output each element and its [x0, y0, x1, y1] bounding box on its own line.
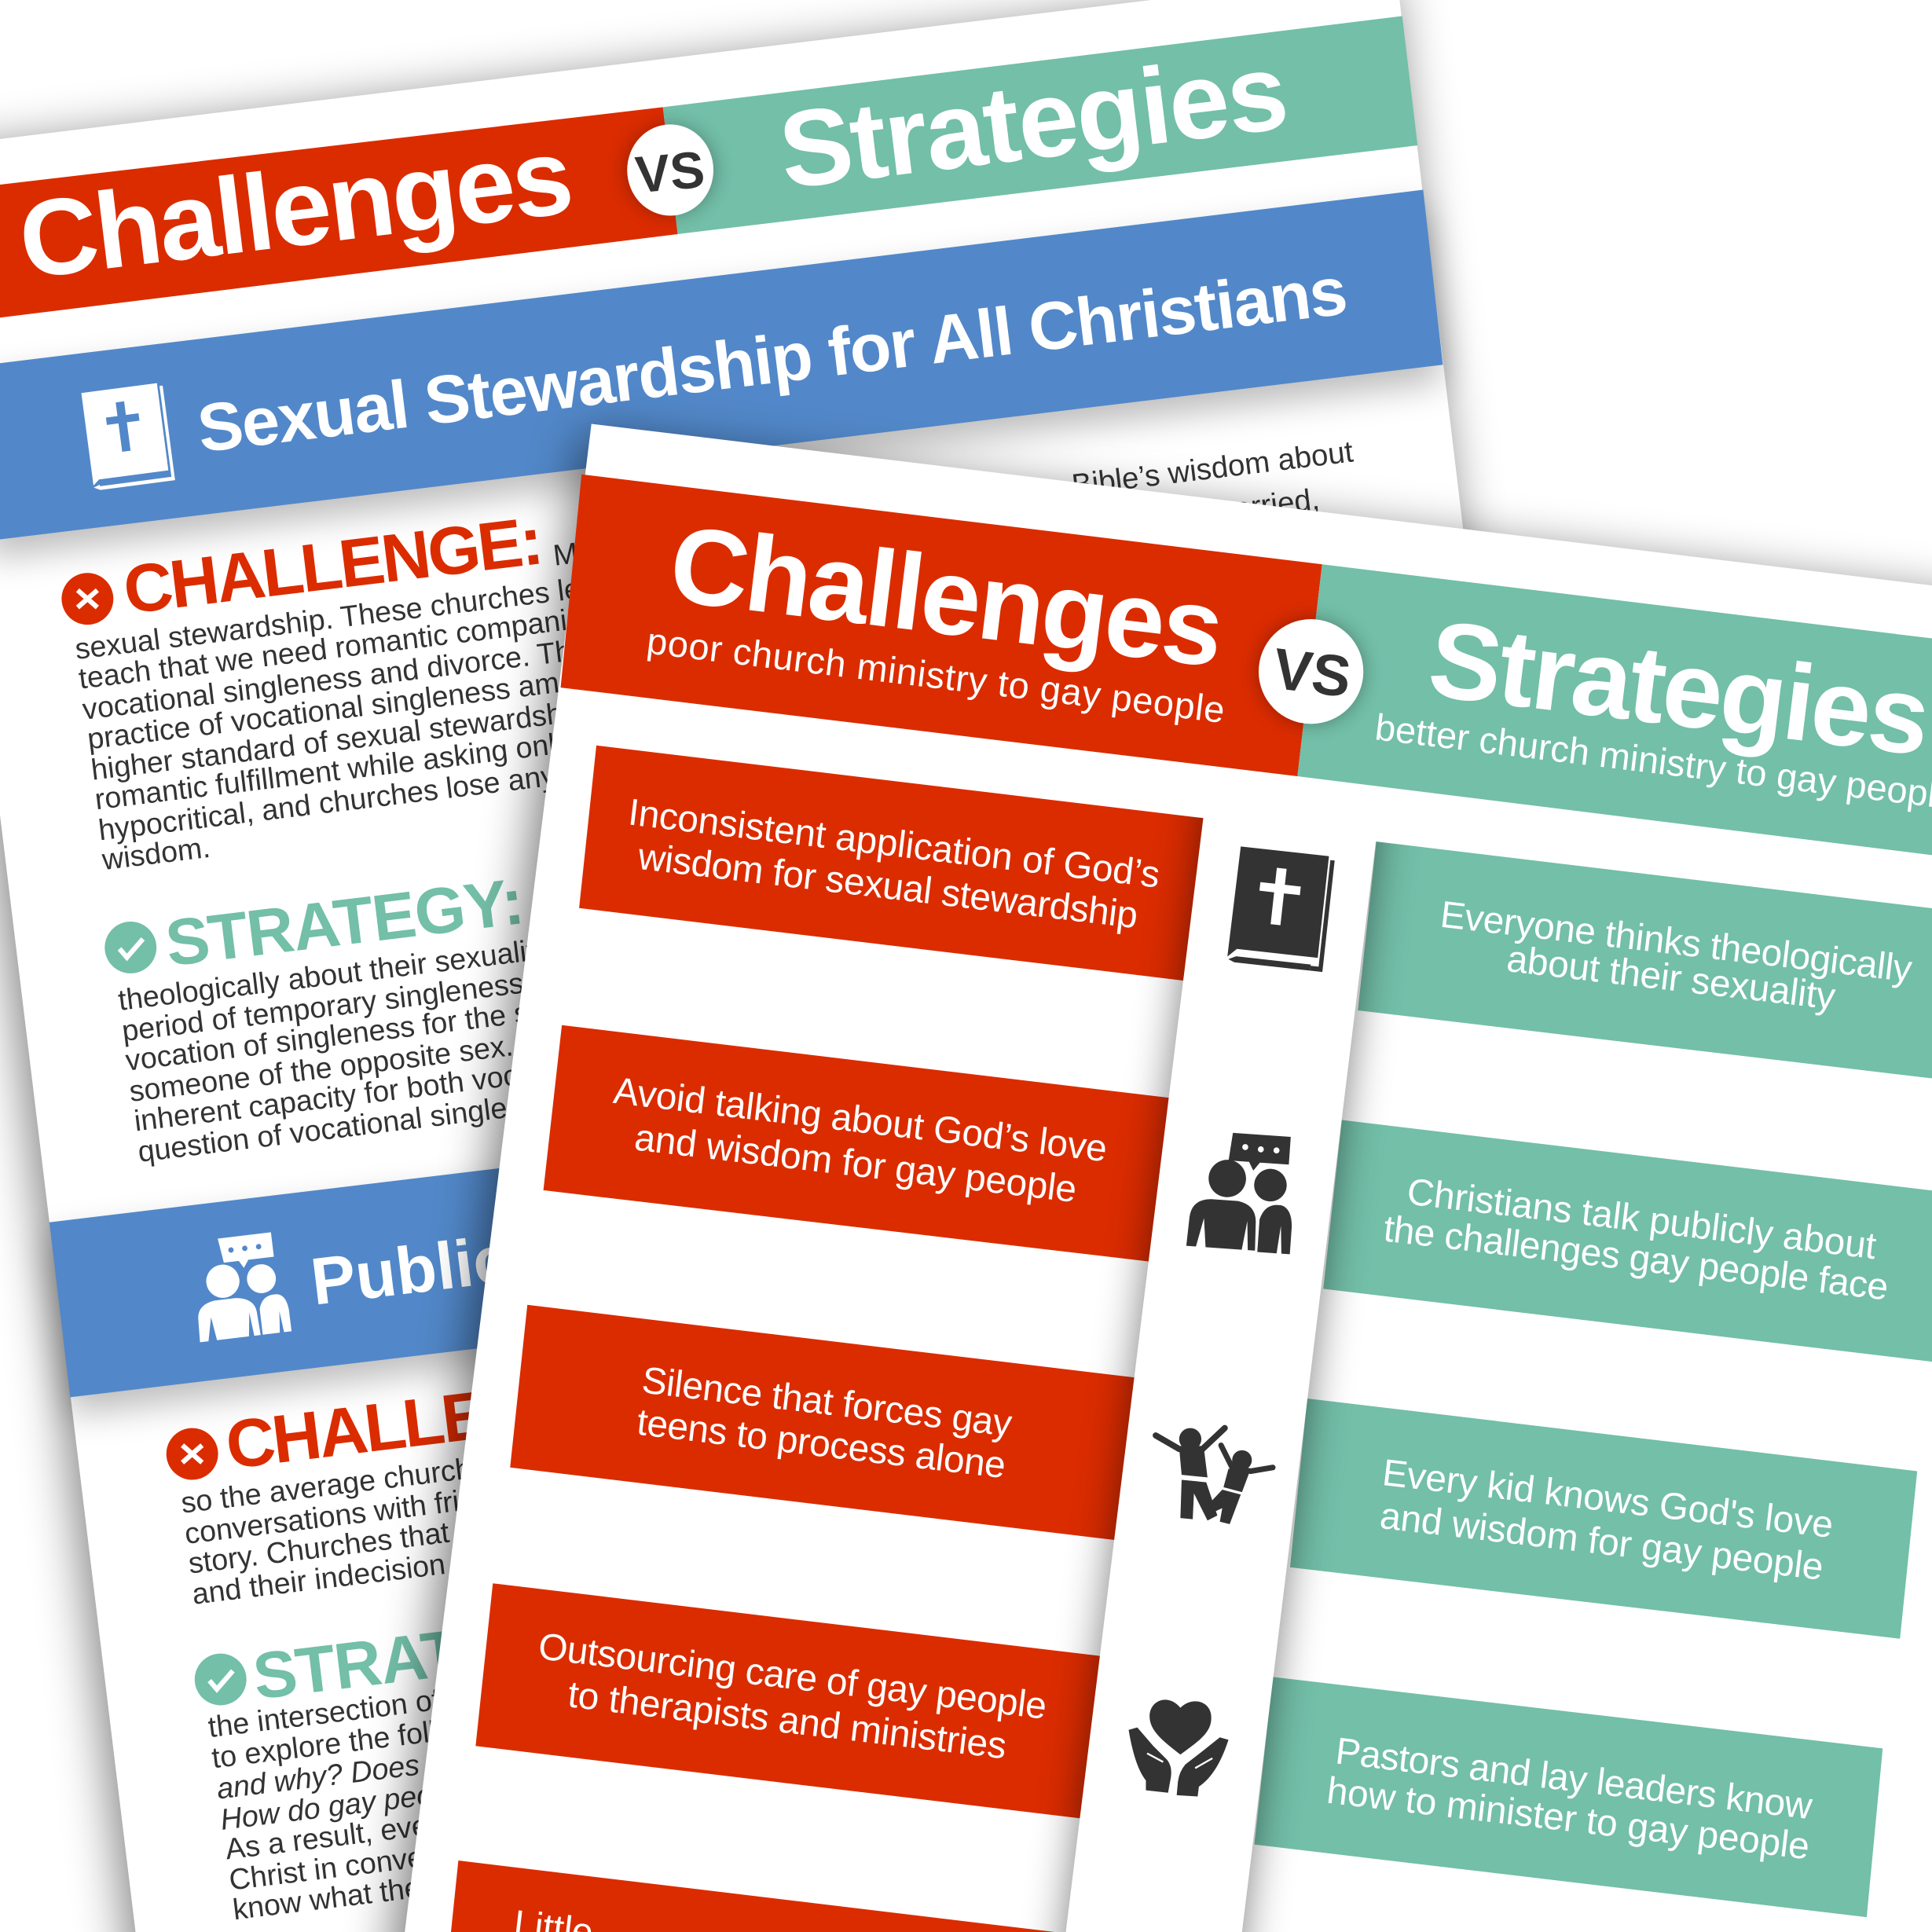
challenge 2 body text: so the average church member	[179, 1437, 589, 1520]
challenge body text: hypocritical, and churches lose any	[97, 758, 558, 846]
box 3	[510, 1305, 1135, 1540]
challenge body text: higher standard of sexual stewardship	[90, 694, 588, 786]
icon: white bible	[82, 383, 175, 491]
box text: strategies: the challenges gay people face	[1381, 1208, 1890, 1309]
challenge body text	[73, 567, 655, 876]
strategy heading: STRATEGY:	[162, 864, 528, 980]
front header: challenges	[561, 475, 1322, 776]
box text: strategies: and wisdom for gay people	[1378, 1495, 1826, 1589]
challenge body text: vocational singleness and divorce. This	[81, 632, 595, 726]
front header: challenges: poor church ministry to gay people	[645, 619, 1227, 731]
right text fragment	[1011, 434, 1355, 553]
icon: challenge x	[61, 573, 113, 625]
strategy body text: theologically about their sexuality	[116, 932, 551, 1017]
box text: challenges: teens to process alone	[635, 1402, 1008, 1487]
band shadow: stewardship	[0, 207, 1443, 558]
box text: strategies: how to minister to gay people	[1325, 1770, 1812, 1868]
section heading: public conversations	[49, 1045, 1550, 1397]
box 4	[475, 1583, 1100, 1819]
strategy body text: period of temporary singleness	[120, 966, 526, 1047]
box text: challenges: Avoid talking about God’s love	[611, 1070, 1109, 1170]
challenge 2 body text: story. Churches that remain	[186, 1504, 549, 1580]
back header: strategies band: Strategies	[773, 31, 1294, 212]
strategy 2 body text: As a result, every	[223, 1806, 454, 1865]
front page	[405, 423, 1932, 1932]
strategy boxes	[1254, 841, 1932, 1917]
icon: strategy check 2	[195, 1654, 247, 1705]
strategy body text: someone of the opposite sex.	[127, 1028, 515, 1108]
front vs badge	[1259, 619, 1363, 724]
strategy body text: vocation of singleness for the sake	[123, 990, 578, 1077]
box text: challenges: Inconsistent application of God’s	[626, 791, 1162, 896]
challenge body text: practice of vocational singleness among	[86, 660, 610, 755]
heading text: Sexual Stewardship for All Christians	[193, 253, 1351, 467]
box text: challenges: Silence that forces gay	[640, 1359, 1014, 1445]
strategy body text: question of vocational singleness	[136, 1083, 570, 1168]
challenge heading: Many churches	[552, 515, 754, 572]
strategy box 2	[1323, 1120, 1932, 1366]
box text: strategies	[1325, 894, 1914, 1868]
challenge body text: romantic fulfillment while asking only	[93, 725, 572, 816]
band shadow: public	[49, 1062, 1550, 1414]
challenge 2 body text: conversations with friends	[183, 1476, 525, 1550]
box text: strategies: about their sexuality	[1505, 938, 1838, 1018]
back vs badge: VS	[633, 140, 707, 203]
challenge 2 body text	[179, 1437, 589, 1611]
challenge heading 2: CHALLENGE:	[222, 1358, 649, 1483]
strategy heading 2: STRATEGY:	[249, 1597, 615, 1713]
front header: strategies	[1297, 564, 1932, 860]
heading text: Public Conversations	[307, 1163, 992, 1319]
right text fragment: those who are married,	[1011, 482, 1322, 553]
box text: challenges: wisdom for sexual stewardship	[635, 836, 1140, 937]
strategy body text	[116, 932, 598, 1168]
box text: strategies: Pastors and lay leaders know	[1333, 1730, 1815, 1828]
back vs badge	[626, 124, 715, 215]
box 1	[579, 746, 1204, 981]
icon: people talking	[1186, 1130, 1298, 1254]
back header: challenges band: Challenges	[13, 115, 579, 302]
box text: strategies: Every kid knows God's love	[1380, 1452, 1835, 1546]
strategy 2 body text	[207, 1675, 542, 1926]
strategy 2 body text: and why? Does scripture	[214, 1733, 542, 1806]
front header: challenges: Challenges	[664, 504, 1230, 690]
strategy body text: inherent capacity for both vocations	[132, 1049, 598, 1138]
box text: challenges	[511, 791, 1162, 1932]
icon: bible	[1226, 846, 1335, 972]
strategy 2 body text: know what they	[231, 1868, 438, 1926]
centre strip	[1066, 764, 1383, 1932]
back header: strategies band	[663, 16, 1417, 234]
front page shadow	[397, 436, 1932, 1932]
icon: children playing	[1156, 1428, 1273, 1524]
challenge body text: teach that we need romantic companionship	[77, 592, 655, 695]
strategy box 4	[1254, 1677, 1883, 1917]
box text: challenges: Outsourcing care of gay people	[536, 1626, 1049, 1728]
strategy box 1	[1358, 841, 1932, 1083]
strategy 2 body text: to explore the following	[210, 1705, 514, 1774]
challenge 2 body text: and their indecision	[190, 1547, 447, 1611]
icon: challenge x 2	[167, 1428, 218, 1479]
box 5	[451, 1861, 1054, 1932]
challenge boxes	[451, 746, 1204, 1932]
box text: strategies: Christians talk publicly about	[1405, 1171, 1879, 1267]
right text fragment: Bible’s wisdom about	[1070, 434, 1355, 502]
box text: challenges: and wisdom for gay people	[632, 1116, 1079, 1211]
section heading: sexual stewardship	[0, 190, 1443, 541]
strategy 2 body text: Christ in conversation	[227, 1829, 513, 1897]
challenge body text: sexual stewardship. These churches lead	[73, 567, 615, 665]
strategy 2 body text: How do gay people	[218, 1773, 474, 1836]
icon: strategy check	[104, 922, 156, 973]
centre strip shadow	[1066, 764, 1383, 1932]
box text: strategies: Everyone thinks theologically	[1438, 894, 1914, 991]
icon: hands holding heart	[1129, 1699, 1229, 1796]
strategy box 3	[1290, 1399, 1917, 1639]
front header: strategies: Strategies	[1423, 598, 1932, 779]
box 2	[544, 1025, 1169, 1262]
challenge heading	[119, 503, 754, 629]
strategy 2 body text: the intersection of faith	[207, 1675, 505, 1743]
front vs badge: VS	[1270, 636, 1355, 709]
box text: challenges: to therapists and ministries	[566, 1674, 1009, 1767]
icon: white people	[188, 1231, 291, 1342]
challenge heading: CHALLENGE:	[119, 503, 547, 629]
challenge body text: wisdom.	[100, 830, 212, 876]
